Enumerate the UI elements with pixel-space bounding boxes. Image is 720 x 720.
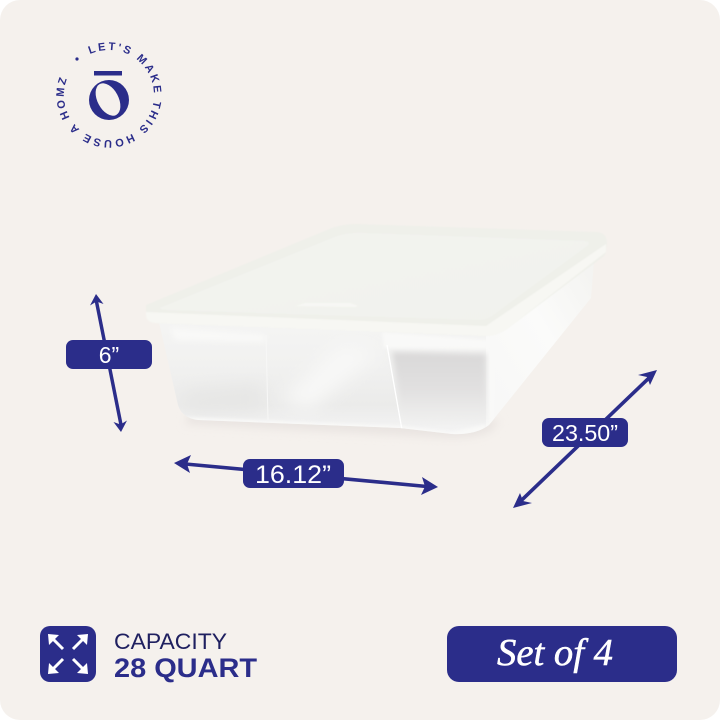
logo bar xyxy=(94,71,122,76)
dimension: width 16.12 inches xyxy=(174,455,438,495)
dimension: height 6 inches: 6” xyxy=(99,342,119,368)
dimension: depth 23.50 inches: 23.50” xyxy=(552,420,618,446)
dimension: height 6 inches xyxy=(66,294,152,432)
product: storage bin with lid xyxy=(172,287,580,436)
capacity text: 28 QUART xyxy=(114,653,258,683)
logo letter xyxy=(89,79,129,120)
badge: set of 4 xyxy=(447,626,677,682)
icon: capacity expand arrows xyxy=(40,626,96,682)
bin lid xyxy=(146,224,607,336)
logo xyxy=(56,42,162,148)
badge: set of 4: Set of 4 xyxy=(497,632,613,674)
width arrow xyxy=(174,455,438,495)
logo ring dot xyxy=(75,57,79,61)
bin shadow xyxy=(185,412,500,438)
capacity text: CAPACITY xyxy=(114,629,227,654)
dimension: depth 23.50 inches xyxy=(513,370,657,508)
dimension: width 16.12 inches: 16.12” xyxy=(255,461,331,489)
depth arrow xyxy=(513,370,657,508)
height arrow xyxy=(90,294,127,432)
capacity text xyxy=(114,629,258,683)
logo ring text: LET'S MAKE THIS HOUSE A HOMZ xyxy=(56,42,162,148)
width label xyxy=(243,459,344,488)
bin body xyxy=(172,287,580,434)
height label xyxy=(66,340,152,369)
depth label xyxy=(542,418,628,447)
